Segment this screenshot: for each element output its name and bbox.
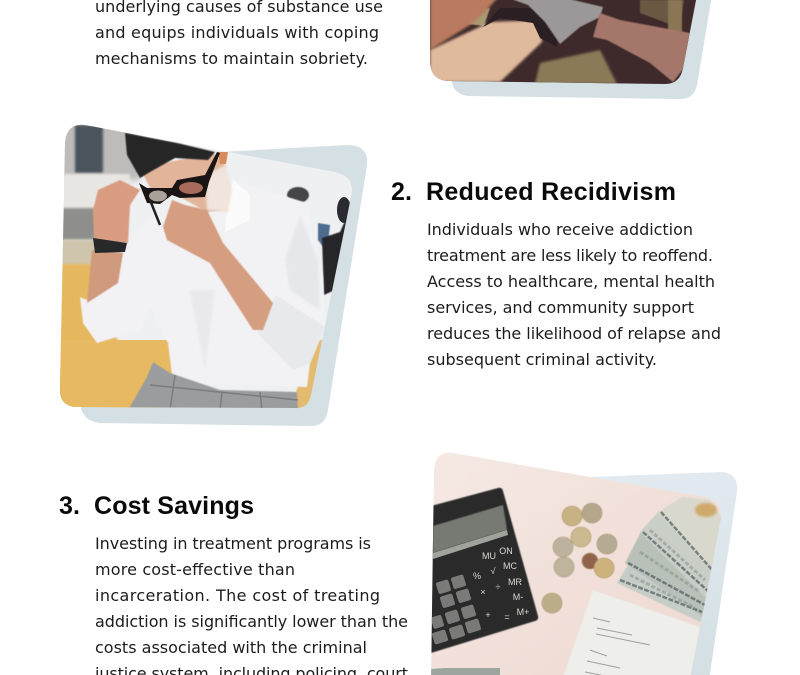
calculator key labels: MR xyxy=(508,577,522,587)
heading: 3. Cost Savings: 3. xyxy=(59,492,80,520)
text block: recidivism description: reduces the likelihood of relapse and xyxy=(427,324,721,343)
man's shirt xyxy=(80,180,325,387)
calculator key labels: MU xyxy=(482,551,496,561)
text block: recidivism description xyxy=(427,220,721,369)
glasses xyxy=(139,152,220,204)
text block: treatment description ending xyxy=(95,0,383,68)
photo backing shape xyxy=(590,472,737,675)
panel: section 2 reduced recidivism xyxy=(55,120,721,426)
text block: recidivism description: Individuals who receive addiction xyxy=(427,220,693,239)
heading: 2. Reduced Recidivism: Reduced Recidivism xyxy=(426,178,676,206)
calculator key labels: MC xyxy=(503,561,517,571)
text block: cost savings description: Investing in treatment programs is xyxy=(95,534,371,553)
trousers xyxy=(127,362,298,412)
arms and hands xyxy=(87,250,123,303)
text block: treatment description ending: mechanisms to maintain sobriety. xyxy=(95,49,368,68)
banknotes xyxy=(617,497,723,622)
text block: cost savings description xyxy=(94,534,408,675)
calculator key labels: + xyxy=(485,610,491,620)
notepad xyxy=(562,590,700,675)
text block: cost savings description: addiction is significantly lower than the xyxy=(95,612,408,631)
calculator key labels: M+ xyxy=(517,607,529,617)
calculator key labels: ÷ xyxy=(496,582,501,592)
panel: section 3 cost savings xyxy=(59,445,737,675)
photo: joined hands xyxy=(430,0,696,84)
banknote bottom edge xyxy=(431,668,500,675)
text block: cost savings description: incarceration. The cost of treating xyxy=(95,586,380,605)
text block: recidivism description: services, and community support xyxy=(427,298,694,317)
coins xyxy=(542,503,617,613)
photo: man rubbing his eyes xyxy=(55,120,360,415)
text block: recidivism description: Access to healthcare, mental health xyxy=(427,272,715,291)
calculator key labels xyxy=(473,546,529,622)
text block: treatment description ending: and equips individuals with coping xyxy=(95,23,379,42)
text block: recidivism description: subsequent criminal activity. xyxy=(427,350,657,369)
text block: recidivism description: treatment are less likely to reoffend. xyxy=(427,246,713,265)
photo backing shape xyxy=(452,0,712,99)
text block: cost savings description: more cost-effective than xyxy=(95,560,295,579)
heading: 2. Reduced Recidivism: 2. xyxy=(391,178,412,206)
calculator key labels: % xyxy=(473,571,481,581)
calculator key labels: √ xyxy=(491,566,496,576)
panel: section 1 closing text and photo xyxy=(95,0,712,99)
calculator xyxy=(431,488,538,653)
photo backing shape xyxy=(80,145,367,426)
calculator key labels: ON xyxy=(499,546,513,556)
calculator key labels: M- xyxy=(513,592,523,602)
text block: cost savings description: costs associated with the criminal xyxy=(95,638,367,657)
heading: 3. Cost Savings: Cost Savings xyxy=(94,492,254,520)
calculator key labels: × xyxy=(480,587,486,597)
head and hair xyxy=(140,153,226,212)
photo: calculator, coins and cash xyxy=(425,445,725,675)
calculator key labels: = xyxy=(504,612,510,622)
